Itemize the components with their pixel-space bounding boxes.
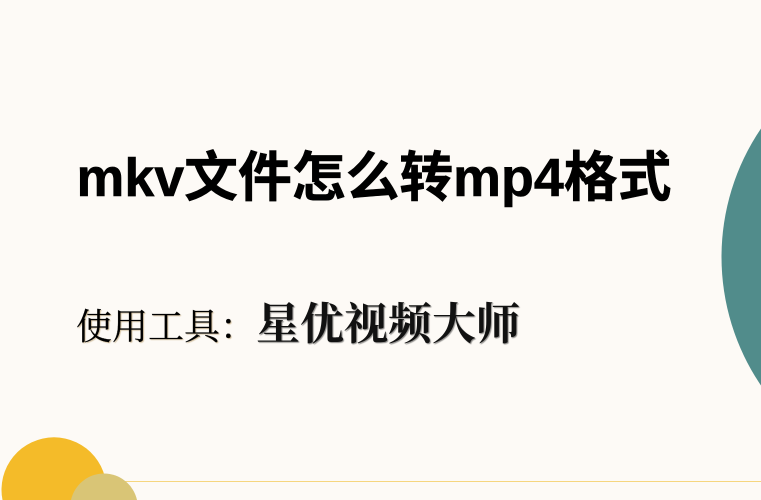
subtitle: tool name: 使用工具：星优视频大师 <box>76 300 520 349</box>
footer line <box>105 481 761 482</box>
decorative circle: teal <box>722 128 761 386</box>
title: mkv文件怎么转mp4格式 <box>76 148 671 208</box>
decorative circles: yellow and khaki <box>2 437 137 500</box>
